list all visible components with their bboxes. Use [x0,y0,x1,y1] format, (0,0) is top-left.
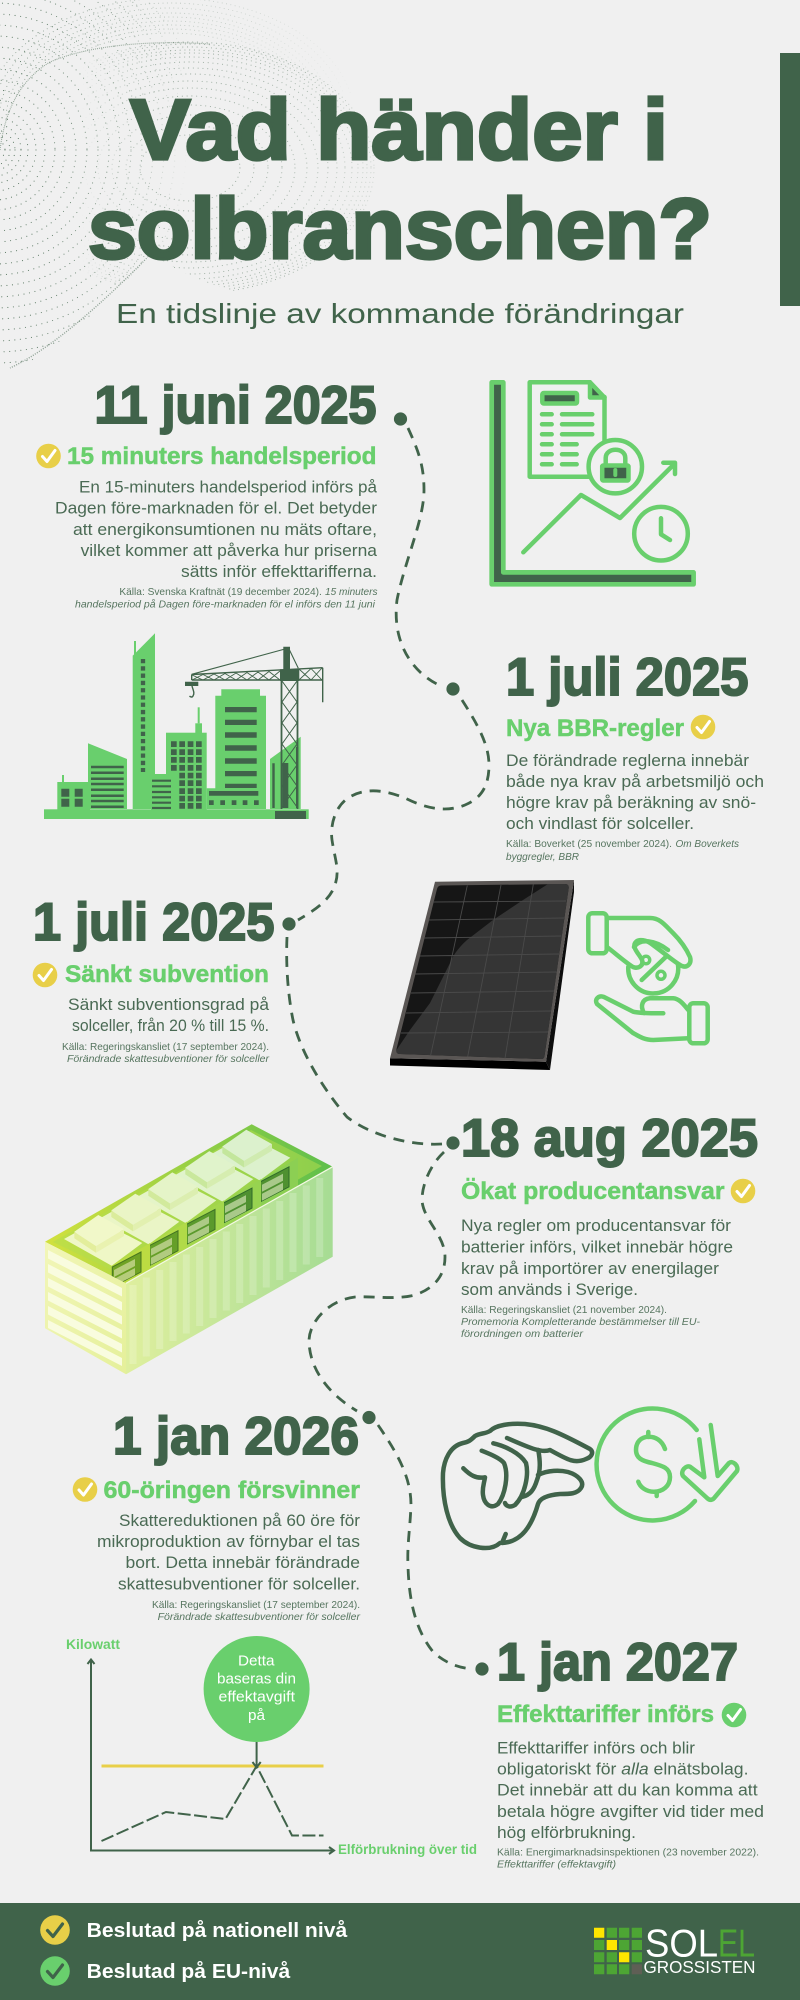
date: 1 juli 2025 [506,648,748,707]
halftone dot wave decoration [0,0,374,368]
container walls [45,1167,333,1374]
icon: yellow check [731,1179,755,1203]
body text: både nya krav på arbetsmiljö och [506,772,764,791]
source: Källa: Regeringskansliet (21 november 2024). [461,1304,667,1316]
date: 1 juli 2025 [33,893,274,952]
callout bubble [204,1636,310,1742]
icon: green check [722,1703,746,1727]
callout bubble: baseras din [217,1671,296,1688]
body text: Skattereduktionen på 60 öre för [119,1511,360,1530]
body text [497,1738,764,1842]
title: solbranschen? [88,182,712,277]
body text: bort. Detta innebär förändrade [126,1553,360,1572]
icon: yellow check [33,963,57,987]
source: Om Boverkets [676,838,740,850]
callout bubble: effektavgift [218,1688,296,1706]
icon: yellow check [36,444,61,468]
callout bubble: på [248,1707,266,1724]
body text: att energikonsumtionen nu mäts oftare, [73,520,377,539]
icon: yellow check [691,715,715,739]
source: Källa: Regeringskansliet (17 september 2024). [152,1599,360,1611]
icon: hands with percent coin [588,913,708,1043]
title: Vad händer i [130,83,668,178]
date: 11 juni 2025 [94,376,376,435]
icon: dollar coin with down arrow [597,1408,737,1520]
legend: EU: Beslutad på EU-nivå [87,1960,291,1983]
chart label: Kilowatt: Kilowatt [66,1636,120,1652]
image: battery container [45,1124,333,1374]
body text: Nya regler om producentansvar för [461,1216,731,1235]
source: handelsperiod på Dagen före-marknaden för el införs den 11 juni [75,599,376,611]
source [62,1041,269,1065]
body text: batterier införs, vilket innebär högre [461,1238,733,1256]
consumption dashed line [102,1766,324,1841]
date: 18 aug 2025 [461,1109,758,1168]
source: Effekttariffer (effektavgift) [497,1858,616,1870]
timeline dashed path [282,412,489,1676]
chart label: time: Elförbrukning över tid [338,1841,477,1857]
body text: De förändrade reglerna innebär [506,751,749,770]
body text: högre krav på beräkning av snö- [506,793,756,812]
battery modules [64,1130,298,1297]
panel: 1 juli 2025 subvention [33,893,275,1065]
body text: skattesubventioner för solceller. [118,1574,360,1594]
legend: national [40,1915,348,1945]
source [506,838,740,863]
source [497,1847,759,1870]
arrow [252,1742,261,1768]
body text [97,1511,360,1594]
heading: Sänkt subvention [65,961,269,988]
source: Källa: Boverket (25 november 2024). [506,838,672,850]
body text [506,751,764,833]
source [152,1599,360,1623]
source: Promemoria Kompletterande bestämmelser till EU- [461,1316,701,1328]
icon: yellow check [73,1477,97,1502]
image: solar panel [390,880,574,1070]
chart: power consumption over time [66,1636,477,1857]
body text: vilket kommer att påverka hur priserna [81,541,378,560]
heading: Effekttariffer införs [497,1701,714,1728]
heading: Nya BBR-regler [506,715,684,742]
heading: Ökat producentansvar [461,1178,724,1205]
source: 15 minuters [325,586,378,598]
source: Förändrade skattesubventioner för solceller [67,1053,269,1065]
body text: mikroproduktion av förnybar el tas [97,1532,360,1551]
date: 1 jan 2027 [497,1633,738,1692]
threshold line [102,1764,324,1768]
legend: national: Beslutad på nationell nivå [87,1919,348,1942]
body text: och vindlast för solceller. [506,814,694,833]
body text: solceller, från 20 % till 15 %. [72,1016,269,1035]
panel: 1 juli 2025 BBR [506,648,764,863]
source: Källa: Regeringskansliet (17 september 2024). [62,1041,269,1053]
body text: som används i Sverige. [461,1280,638,1299]
body text: obligatoriskt för alla elnätsbolag. [497,1760,748,1778]
subtitle: En tidslinje av kommande förändringar [116,298,684,329]
icon: city skyline with crane [44,633,323,819]
body text: Sänkt subventionsgrad på [68,995,270,1014]
body text: En 15-minuters handelsperiod införs på [79,478,378,497]
date: 1 jan 2026 [113,1407,359,1466]
source [461,1304,701,1340]
callout bubble: Detta [238,1652,275,1670]
logo: Solel Grossisten: SOL [645,1923,718,1966]
body text [55,478,378,581]
body text: Dagen före-marknaden för el. Det betyder [55,499,377,518]
body text: sätts inför effekttarifferna. [181,562,377,581]
footer [0,1903,800,2000]
panel: 1 jan 2027 [497,1633,764,1870]
body text [461,1216,733,1299]
heading: 15 minuters handelsperiod [67,443,376,470]
body text [68,995,270,1035]
icon: document, chart, lock and clock [492,382,694,584]
body text: Det innebär att du kan komma att [497,1781,758,1800]
chart axes [88,1660,334,1854]
logo: Solel Grossisten [594,1923,756,1977]
source: byggregler, BBR [506,851,579,863]
body text: Effekttariffer införs och blir [497,1738,695,1758]
source: förordningen om batterier [461,1328,584,1340]
right side bar [780,53,800,306]
heading: 60-öringen försvinner [104,1477,360,1504]
legend: EU [40,1956,291,1986]
panel: 11 juni 2025 [36,376,378,611]
panel: 18 aug 2025 [461,1109,758,1340]
body text: betala högre avgifter vid tider med [497,1802,764,1821]
source [75,586,378,611]
source: Källa: Svenska Kraftnät (19 december 2024). [119,586,322,598]
title [88,83,712,277]
panel: 1 jan 2026 [73,1407,360,1623]
logo: Solel Grossisten: EL [718,1923,755,1966]
body text: hög elförbrukning. [497,1823,636,1842]
source: Källa: Energimarknadsinspektionen (23 november 2022). [497,1847,759,1859]
icon: pinching hand [443,1424,592,1548]
logo: Solel Grossisten: GROSSISTEN [644,1957,756,1977]
body text: krav på importörer av energilager [461,1259,719,1278]
source: Förändrade skattesubventioner för solceller [158,1611,360,1623]
